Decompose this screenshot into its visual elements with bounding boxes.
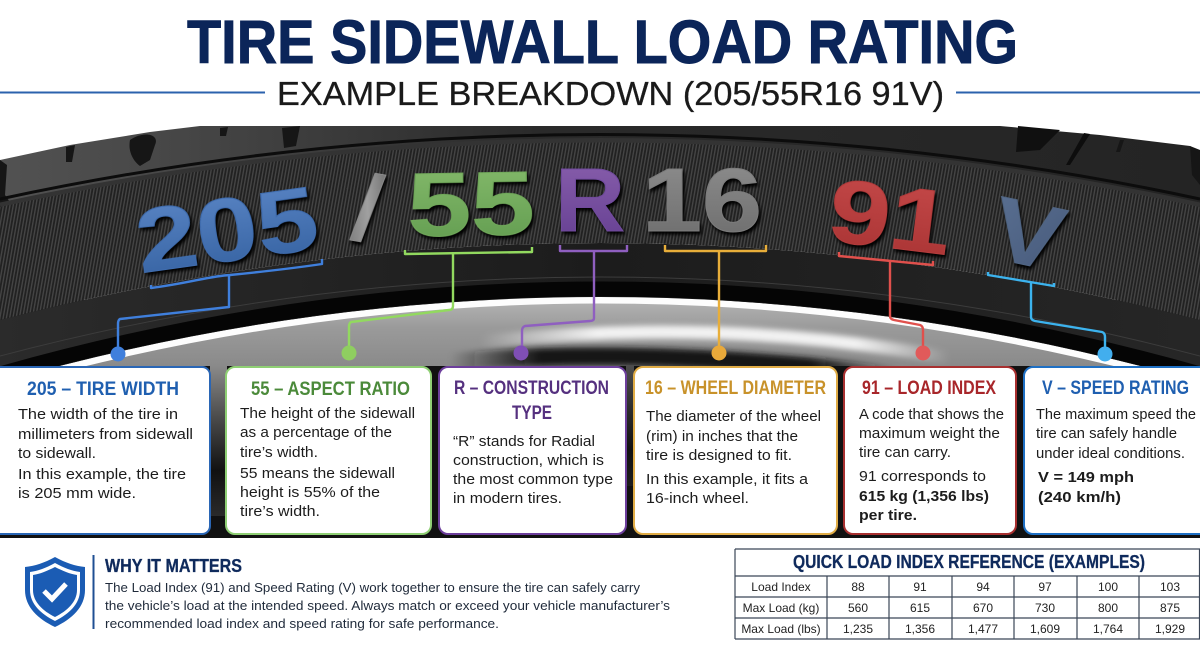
tread grooves <box>0 126 1200 210</box>
leader: speed rating <box>988 272 1112 362</box>
row: max load kg: 615 <box>910 601 930 615</box>
why it matters text: WHY IT MATTERS <box>105 556 242 576</box>
text: load index description: tire can carry. <box>859 444 951 461</box>
text: wheel diameter description: (rim) in inches that the <box>646 428 798 445</box>
row: max load kg: 875 <box>1160 601 1180 615</box>
text: wheel diameter description <box>646 408 821 507</box>
row: max load kg: 800 <box>1098 601 1118 615</box>
text: aspect ratio description: 55 means the sidewall <box>240 465 395 482</box>
text: load index description: maximum weight the <box>859 425 1000 442</box>
text: wheel diameter description: 16-inch wheel. <box>646 490 749 507</box>
leader: wheel diameter <box>665 245 766 360</box>
text: speed rating description: under ideal conditions. <box>1036 445 1185 462</box>
text: aspect ratio description: tire’s width. <box>240 444 318 461</box>
text: tire width description: is 205 mm wide. <box>18 485 136 502</box>
heading: wheel diameter: 16 – WHEEL DIAMETER <box>645 378 826 399</box>
row: max load lbs: Max Load (lbs) <box>741 622 821 636</box>
leader: aspect ratio <box>342 247 532 360</box>
text: speed rating description: V = 149 mph <box>1038 469 1134 486</box>
text: aspect ratio description <box>240 405 415 520</box>
row: max load lbs: 1,356 <box>905 622 935 636</box>
why it matters text: the vehicle’s load at the intended speed. Always match or exceed your vehicle manufacturer’s <box>105 598 671 613</box>
sidewall code: 16: 16 <box>642 151 762 251</box>
text: tire width description <box>18 406 193 502</box>
row: max load lbs: 1,609 <box>1030 622 1060 636</box>
text: load index description: per tire. <box>859 507 917 524</box>
text: wheel diameter description: The diameter of the wheel <box>646 408 821 425</box>
subtitle with rules: EXAMPLE BREAKDOWN (205/55R16 91V) <box>277 76 944 113</box>
panel: aspect ratio <box>226 367 431 534</box>
text: construction type description: construction, which is <box>453 452 604 469</box>
row: load index: 100 <box>1098 580 1118 594</box>
heading: tire width: 205 – TIRE WIDTH <box>27 379 179 400</box>
panel: construction type <box>439 367 626 534</box>
text: speed rating description: tire can safely handle <box>1036 425 1177 442</box>
wheel rim <box>60 297 1140 366</box>
why it matters text: The Load Index (91) and Speed Rating (V) work together to ensure the tire can safely carry <box>105 580 641 595</box>
text: aspect ratio description: height is 55% of the <box>240 484 380 501</box>
heading: aspect ratio: 55 – ASPECT RATIO <box>251 379 410 400</box>
tire photo <box>0 126 1200 538</box>
row: max load lbs: 1,929 <box>1155 622 1185 636</box>
sidewall code: 91: 91 <box>824 161 957 275</box>
text: tire width description: In this example, the tire <box>18 466 186 483</box>
text: wheel diameter description: In this example, it fits a <box>646 471 809 488</box>
row: load index: 97 <box>1038 580 1052 594</box>
lit gaps between cards <box>210 366 227 516</box>
row: max load lbs: 1,764 <box>1093 622 1123 636</box>
leader: construction type <box>514 245 627 360</box>
heading: load index: 91 – LOAD INDEX <box>862 378 996 399</box>
text: speed rating description <box>1036 406 1196 506</box>
row: load index <box>751 580 1180 594</box>
text: aspect ratio description: tire’s width. <box>240 503 320 520</box>
text: construction type description <box>453 433 613 507</box>
heading: construction type: TYPE <box>512 403 552 424</box>
text: speed rating description: The maximum speed the <box>1036 406 1196 423</box>
sidewall code: R: R <box>555 151 625 251</box>
text: aspect ratio description: The height of the sidewall <box>240 405 415 422</box>
text: aspect ratio description: as a percentage of the <box>240 424 392 441</box>
table: quick load index reference <box>735 549 1200 639</box>
sidewall code: 205: 205 <box>130 168 324 293</box>
why it matters text <box>105 556 671 631</box>
sidewall code: 55: 55 <box>407 154 535 256</box>
row: max load lbs: 1,477 <box>968 622 998 636</box>
heading: construction type <box>454 378 609 424</box>
row: max load kg: Max Load (kg) <box>743 601 819 615</box>
text: wheel diameter description: tire is designed to fit. <box>646 447 792 464</box>
row: load index: 94 <box>976 580 990 594</box>
text: speed rating description: (240 km/h) <box>1038 489 1121 506</box>
panel: wheel diameter <box>634 367 837 534</box>
row: max load kg <box>743 601 1180 615</box>
row: max load kg: 730 <box>1035 601 1055 615</box>
row: load index: 91 <box>913 580 927 594</box>
panel: speed rating <box>1024 367 1200 534</box>
tread <box>0 126 1200 215</box>
tire lower sidewall band <box>0 243 1200 382</box>
heading: construction type: R – CONSTRUCTION <box>454 378 609 399</box>
sidewall code: slash: / <box>346 154 390 262</box>
sidewall code: V: V <box>984 179 1073 291</box>
row: load index: 103 <box>1160 580 1180 594</box>
leader: load index <box>839 252 933 360</box>
text: tire width description: millimeters from sidewall <box>18 426 193 443</box>
row: load index: Load Index <box>751 580 811 594</box>
text: load index description: 91 corresponds to <box>859 468 986 485</box>
text: load index description: 615 kg (1,356 lbs) <box>859 488 989 505</box>
why it matters text: recommended load index and speed rating for safe performance. <box>105 616 499 631</box>
row: max load kg: 560 <box>848 601 868 615</box>
row: max load kg: 670 <box>973 601 993 615</box>
text: tire width description: to sidewall. <box>18 445 96 462</box>
row: max load lbs <box>741 622 1185 636</box>
leader: tire width <box>110 259 322 362</box>
text: load index description <box>859 406 1004 524</box>
title: TIRE SIDEWALL LOAD RATING <box>187 8 1018 76</box>
text: construction type description: “R” stands for Radial <box>453 433 595 450</box>
icon: shield with check <box>25 557 85 627</box>
text: load index description: A code that shows the <box>859 406 1004 423</box>
text: construction type description: in modern tires. <box>453 490 562 507</box>
text: tire width description: The width of the tire in <box>18 406 178 423</box>
table title: QUICK LOAD INDEX REFERENCE (EXAMPLES) <box>793 552 1145 572</box>
ribbed sidewall <box>0 142 1200 320</box>
divider <box>92 555 94 629</box>
text: construction type description: the most common type <box>453 471 613 488</box>
panel: tire width <box>0 367 210 534</box>
row: max load lbs: 1,235 <box>843 622 873 636</box>
panel: load index <box>844 367 1016 534</box>
row: load index: 88 <box>851 580 865 594</box>
